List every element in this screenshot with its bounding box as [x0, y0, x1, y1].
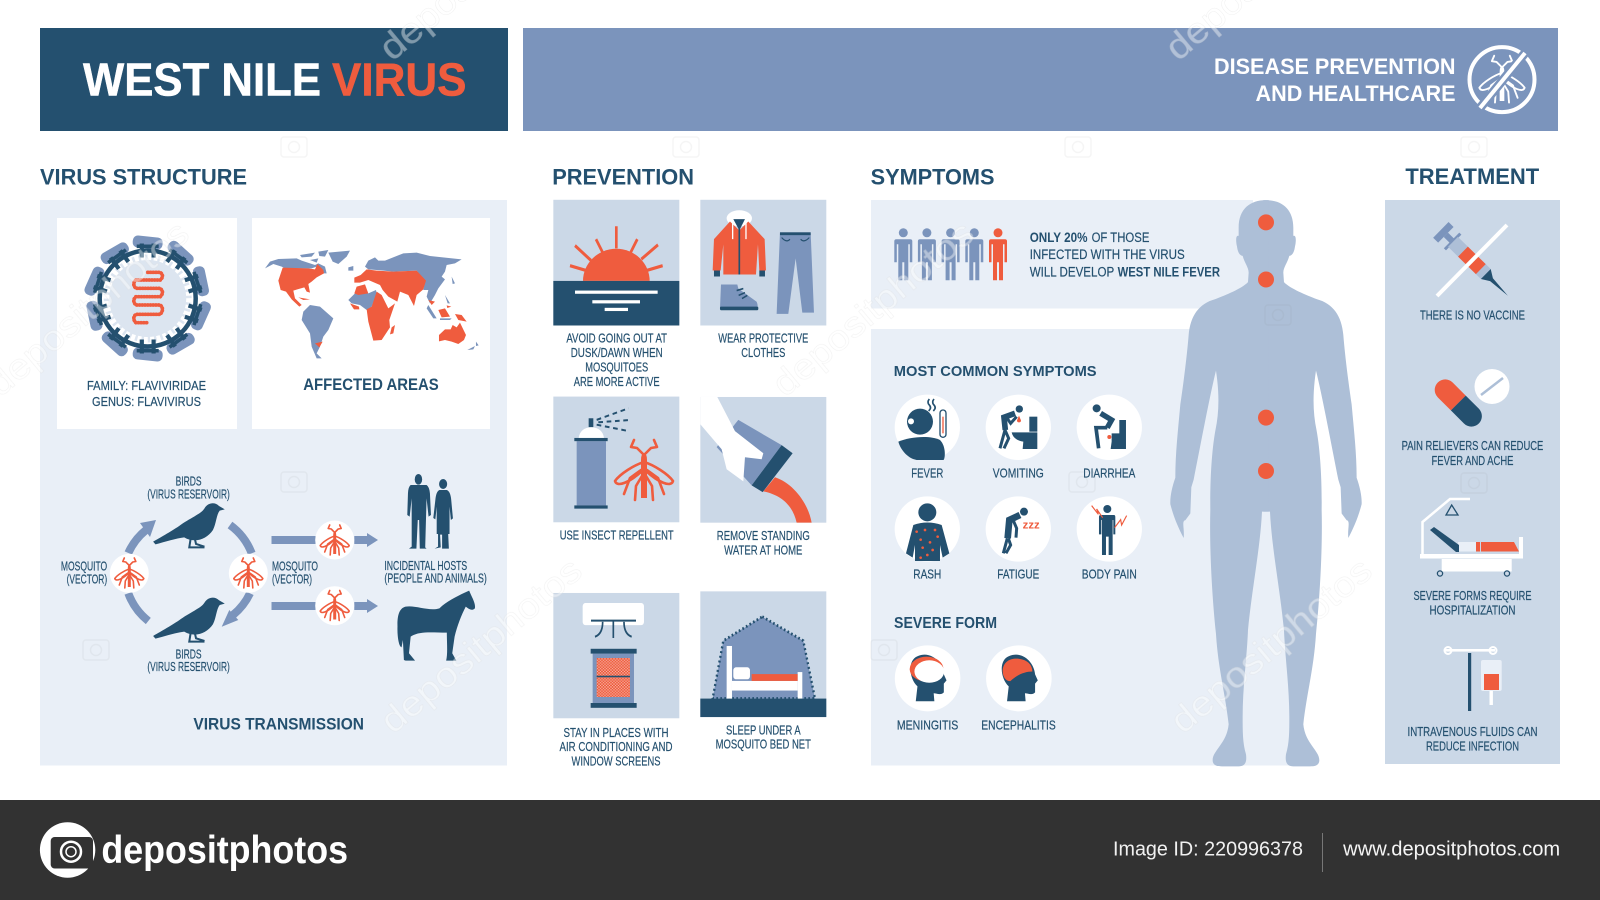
- transmission diagram: [61, 474, 487, 734]
- caption: avoid going out: MOSQUITOES: [585, 360, 648, 374]
- caption: intravenous fluids: [1408, 725, 1538, 753]
- icon: vomiting: [986, 395, 1051, 460]
- icon: mosquito right: [229, 554, 268, 593]
- callout: only 20 percent: WEST NILE FEVER: [1118, 264, 1220, 279]
- image id: Image ID: 220996378: [1113, 839, 1303, 861]
- icon: encephalitis: [986, 645, 1052, 711]
- caption: pain relievers: [1402, 439, 1543, 468]
- callout: only 20 percent: INFECTED WITH THE VIRUS: [1030, 247, 1185, 262]
- label: birds bottom: BIRDS: [176, 647, 202, 661]
- label: mosquito left: MOSQUITO: [61, 560, 107, 574]
- icon: diarrhea: [1077, 395, 1142, 460]
- caption: intravenous fluids: REDUCE INFECTION: [1426, 739, 1519, 753]
- label: mosquito left: [61, 560, 107, 586]
- caption: protective clothes: [718, 332, 808, 360]
- icon row: five people: [894, 228, 1007, 280]
- heading: symptoms: SYMPTOMS: [871, 164, 994, 189]
- banner subtitle: DISEASE PREVENTION: [1214, 54, 1456, 79]
- tile: dusk and dawn: [553, 200, 679, 389]
- icon: bottom bird: [153, 598, 225, 642]
- icon: hospital bed: [1420, 499, 1523, 576]
- caption: air conditioning: [560, 726, 672, 768]
- site url: www.depositphotos.com: [1342, 839, 1560, 861]
- icon: mosquito: [615, 440, 673, 500]
- icon: mosquito left: [110, 554, 149, 593]
- icon: meningitis: [895, 645, 960, 711]
- caption: protective clothes: WEAR PROTECTIVE: [718, 332, 808, 346]
- tile: air conditioning: [553, 593, 679, 768]
- icon: capsule and tablet: [1430, 369, 1510, 431]
- title: virus: VIRUS: [332, 54, 466, 106]
- tile: standing water: [700, 397, 826, 558]
- callout: only 20 percent: [1030, 230, 1220, 279]
- callout: only 20 percent: ONLY 20%: [1030, 230, 1088, 245]
- label: birds bottom: (VIRUS RESERVOIR): [147, 660, 230, 674]
- body marker: abdomen: [1258, 410, 1274, 426]
- caption: intravenous fluids: INTRAVENOUS FLUIDS CAN: [1408, 725, 1538, 739]
- footer bar: [0, 800, 1600, 900]
- label: incidental hosts: (PEOPLE AND ANIMALS): [384, 572, 487, 586]
- caption: insect repellent: USE INSECT REPELLENT: [560, 529, 674, 543]
- icon: mosquito lower relay: [315, 586, 354, 625]
- icon: horse: [397, 591, 475, 661]
- label: mosquito left: (VECTOR): [67, 572, 107, 586]
- panel: treatment: [1385, 200, 1560, 764]
- caption: no vaccine: THERE IS NO VACCINE: [1420, 308, 1525, 322]
- caption: air conditioning: WINDOW SCREENS: [572, 754, 660, 768]
- icon: people: [407, 474, 453, 549]
- symptom icons: [895, 395, 1142, 562]
- caption: air conditioning: AIR CONDITIONING AND: [560, 740, 672, 754]
- body marker: head: [1258, 214, 1274, 230]
- caption: bed net: [716, 724, 811, 752]
- title: west nile: WEST NILE: [83, 54, 321, 106]
- caption: avoid going out: AVOID GOING OUT AT: [566, 332, 667, 346]
- caption: bed net: MOSQUITO BED NET: [716, 738, 811, 752]
- card: affected areas: [252, 218, 490, 429]
- icon: virus particle: [82, 235, 213, 362]
- watermarks: depositphotos: [372, 549, 590, 741]
- icon: rash: [895, 496, 960, 562]
- labels: symptoms: DIARRHEA: [1083, 466, 1136, 480]
- label: incidental hosts: INCIDENTAL HOSTS: [384, 559, 467, 573]
- heading: severe form: SEVERE FORM: [894, 615, 997, 632]
- affected areas label: AFFECTED AREAS: [303, 376, 439, 394]
- icon: body pain: [1077, 496, 1142, 562]
- watermarks: [0, 0, 1487, 741]
- world map: [265, 250, 479, 358]
- icon: top bird: [153, 503, 225, 547]
- tile: insect repellent: [553, 397, 679, 543]
- caption: hospitalization: [1414, 589, 1532, 618]
- caption: avoid going out: DUSK/DAWN WHEN: [571, 346, 663, 360]
- label: birds top: (VIRUS RESERVOIR): [147, 487, 230, 501]
- heading: most common symptoms: MOST COMMON SYMPTOMS: [894, 363, 1097, 380]
- label: mosquito right: MOSQUITO: [272, 560, 318, 574]
- labels: symptoms: VOMITING: [993, 466, 1044, 480]
- banner subtitle: AND HEALTHCARE: [1256, 81, 1456, 106]
- icon: fever: [895, 395, 960, 460]
- caption: standing water: REMOVE STANDING: [717, 529, 810, 543]
- labels: symptoms: RASH: [913, 567, 941, 581]
- tile: bed net: [700, 591, 826, 752]
- heading: virus structure: VIRUS STRUCTURE: [40, 164, 247, 190]
- caption: air conditioning: STAY IN PLACES WITH: [564, 726, 668, 740]
- labels: symptoms: BODY PAIN: [1082, 567, 1137, 581]
- icon: fatigue: [986, 496, 1051, 562]
- cycle arrows: [128, 520, 252, 627]
- body marker: lower abdomen: [1258, 463, 1274, 479]
- virus family text: GENUS: FLAVIVIRUS: [92, 395, 201, 409]
- labels: symptoms: [911, 466, 1137, 581]
- tile: protective clothes: [700, 200, 826, 360]
- logo: wordmark: depositphotos: [101, 829, 348, 872]
- caption: hospitalization: SEVERE FORMS REQUIRE: [1414, 589, 1532, 603]
- label: birds top: BIRDS: [176, 475, 202, 489]
- caption: avoid going out: [566, 332, 667, 389]
- label: birds bottom: [147, 647, 230, 674]
- icon: mosquito upper relay: [315, 520, 354, 560]
- icon: iv drip: [1444, 647, 1502, 711]
- severe form icons: [895, 645, 1052, 711]
- label: birds top: [147, 475, 230, 501]
- header: disease prevention banner: [523, 28, 1558, 131]
- label: mosquito right: [272, 560, 318, 586]
- caption: pain relievers: PAIN RELIEVERS CAN REDUCE: [1402, 439, 1543, 453]
- logo: camera mark: [40, 822, 95, 878]
- labels: symptoms: FEVER: [911, 466, 943, 480]
- callout: only 20 percent: WILL DEVELOP: [1030, 264, 1114, 279]
- card: virus family: [57, 218, 237, 429]
- caption: protective clothes: CLOTHES: [741, 346, 785, 360]
- icon: no mosquito: [1470, 47, 1534, 112]
- labels: severe forms: [897, 718, 1056, 732]
- figure: human body with red markers: [1170, 200, 1362, 766]
- callout: only 20 percent: OF THOSE: [1092, 230, 1149, 245]
- label: mosquito right: (VECTOR): [272, 572, 312, 586]
- arrow: to animals: [272, 599, 378, 613]
- virus family text: [87, 379, 206, 409]
- label: incidental hosts: [384, 559, 487, 586]
- panel: prevention: [553, 200, 826, 768]
- label: virus transmission: VIRUS TRANSMISSION: [193, 716, 364, 734]
- panel: virus structure: [40, 200, 507, 766]
- labels: severe forms: ENCEPHALITIS: [981, 718, 1056, 732]
- caption: avoid going out: ARE MORE ACTIVE: [574, 375, 660, 389]
- heading: prevention: PREVENTION: [552, 164, 694, 189]
- arrow: to people: [272, 533, 378, 547]
- caption: bed net: SLEEP UNDER A: [726, 724, 801, 738]
- virus family text: FAMILY: FLAVIVIRIDAE: [87, 379, 206, 393]
- caption: standing water: [717, 529, 810, 558]
- labels: severe forms: MENINGITIS: [897, 718, 958, 732]
- caption: standing water: WATER AT HOME: [724, 544, 802, 558]
- icon: syringe crossed out: [1433, 222, 1516, 304]
- caption: hospitalization: HOSPITALIZATION: [1430, 604, 1516, 618]
- label: fatigue zzz: zzz: [1023, 520, 1040, 532]
- caption: pain relievers: FEVER AND ACHE: [1432, 454, 1514, 468]
- header: title banner: [40, 28, 508, 131]
- watermarks: depositphotos: [764, 212, 982, 404]
- heading: treatment: TREATMENT: [1405, 164, 1539, 189]
- watermarks: depositphotos: [1162, 549, 1380, 741]
- body marker: neck: [1258, 272, 1274, 288]
- panel: symptoms: [871, 200, 1362, 766]
- labels: symptoms: FATIGUE: [997, 567, 1039, 581]
